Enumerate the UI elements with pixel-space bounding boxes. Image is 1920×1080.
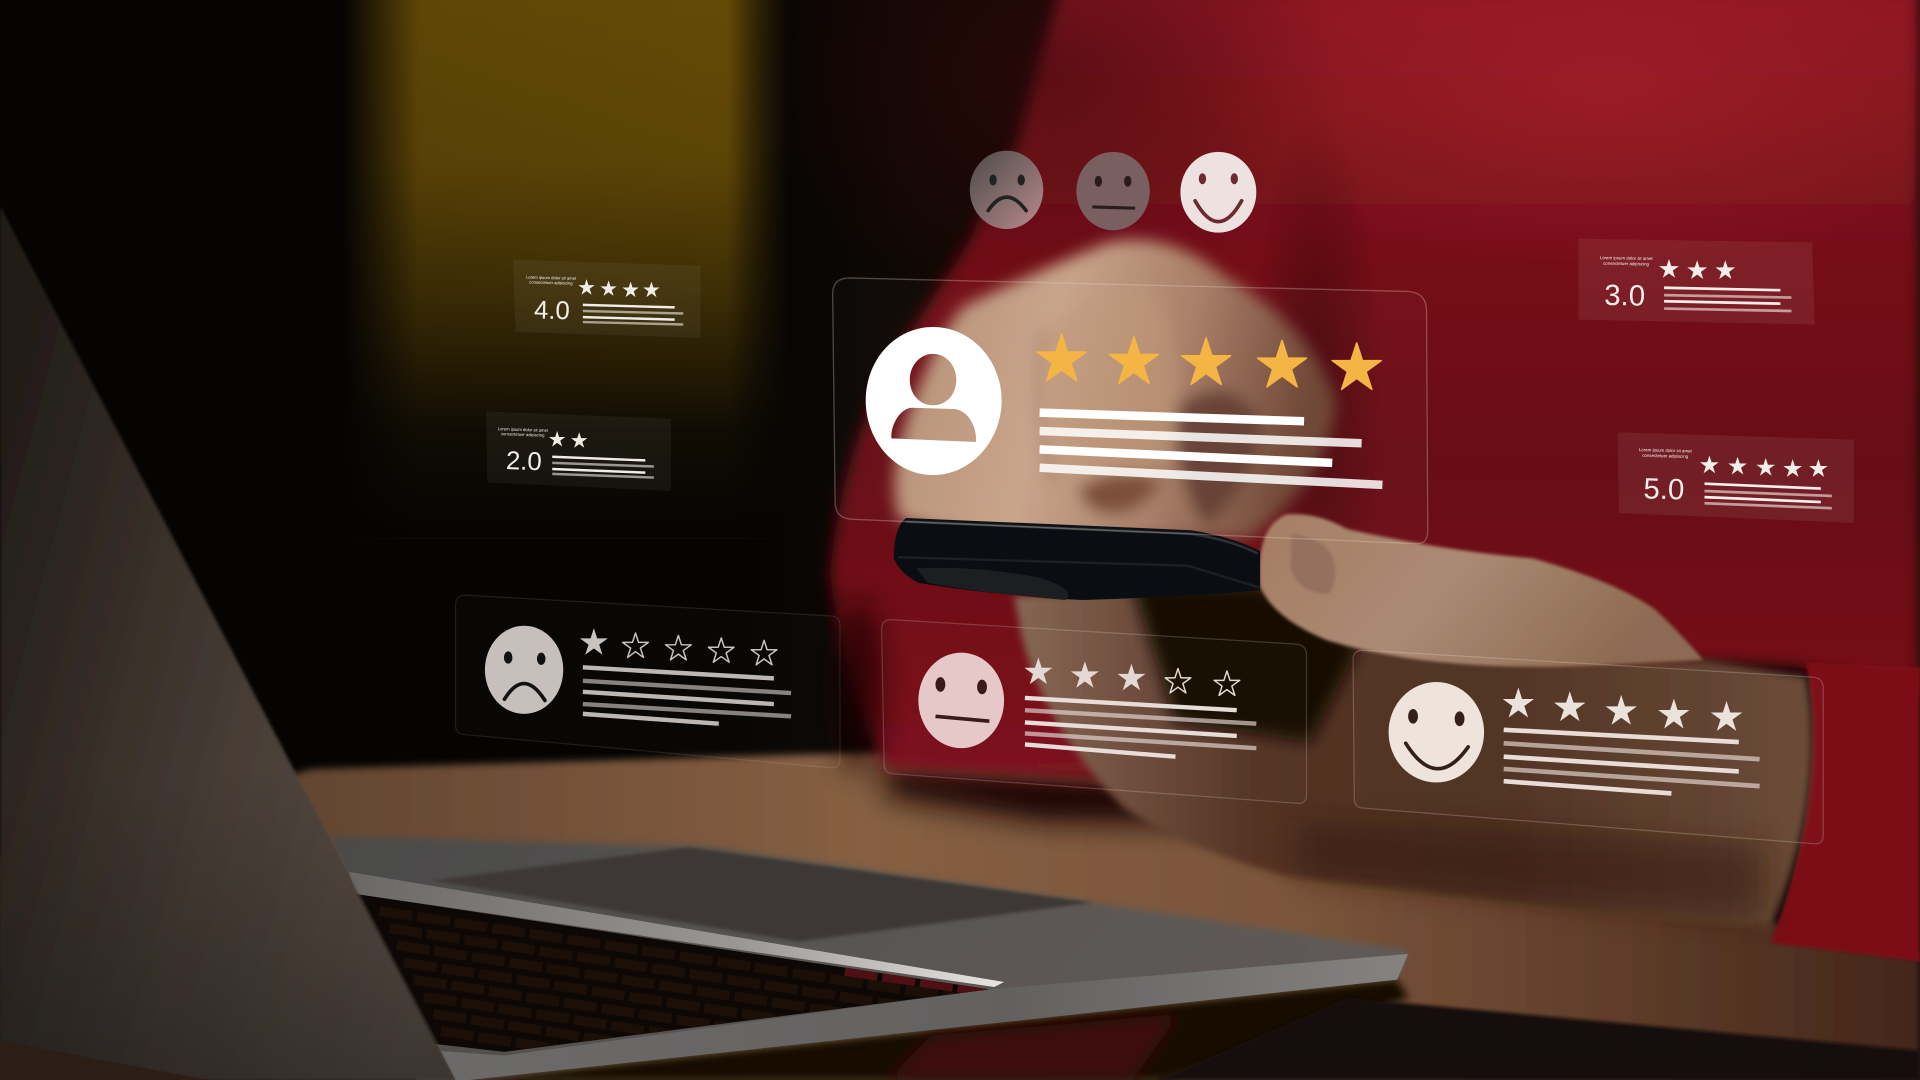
caption: Lorem ipsum dolor sit amet xyxy=(526,275,577,281)
emoji row xyxy=(970,151,1256,233)
stars xyxy=(1659,259,1735,279)
score: 4.0 xyxy=(534,296,570,325)
panel: 3.0 rating xyxy=(1578,239,1815,324)
review text lines xyxy=(1025,698,1256,757)
review text lines xyxy=(583,667,791,724)
icon: sad face xyxy=(485,626,563,714)
laptop lid xyxy=(0,206,456,1080)
icon: neutral face xyxy=(918,653,1004,748)
caption: Lorem ipsum dolor sit amet xyxy=(1639,447,1693,454)
panel: 5.0 rating xyxy=(1618,432,1854,523)
text lines xyxy=(1664,288,1791,311)
review text lines xyxy=(1040,413,1382,485)
hand: holding phone xyxy=(1014,514,1812,927)
score: 2.0 xyxy=(506,447,542,476)
laptop trackpad xyxy=(432,847,1092,942)
thumb xyxy=(1259,514,1703,667)
panel: 4.0 rating xyxy=(513,260,700,338)
thumb nail xyxy=(1291,534,1335,594)
dark surface under laptop xyxy=(469,980,1408,1080)
panel: neutral review card xyxy=(882,620,1307,803)
laptop xyxy=(0,206,1408,1080)
score: 3.0 xyxy=(1604,279,1645,313)
caption: Lorem ipsum dolor sit amet xyxy=(498,426,549,433)
five star rating xyxy=(1503,688,1742,731)
caption: consectetuer adipiscing xyxy=(501,431,545,438)
panel: 2.0 rating xyxy=(486,411,671,491)
laptop hinge strip xyxy=(349,872,1004,987)
panel: main review card xyxy=(833,278,1428,544)
caption: Lorem ipsum dolor sit amet xyxy=(1600,255,1653,261)
three star rating xyxy=(1024,658,1240,695)
bottom right dark object xyxy=(1157,998,1920,1080)
icon: happy face xyxy=(1389,682,1484,782)
panel: positive review card xyxy=(1353,650,1823,844)
caption: consectetuer adipiscing xyxy=(1642,453,1689,459)
text lines xyxy=(583,305,683,324)
icon: neutral emoji xyxy=(1076,152,1150,230)
sweater cuff xyxy=(1771,662,1920,961)
one star rating xyxy=(580,628,777,665)
lid bottom shading xyxy=(0,206,456,1080)
hand: pointing finger xyxy=(894,240,1336,539)
stars xyxy=(578,279,660,297)
icon: user avatar xyxy=(866,327,1002,475)
icon: happy emoji xyxy=(1180,152,1256,233)
review text lines xyxy=(1504,730,1760,793)
laptop keys xyxy=(379,906,988,1049)
gold five star rating xyxy=(1037,334,1381,389)
text lines xyxy=(1704,484,1832,508)
smartphone xyxy=(894,518,1260,600)
caption: consectetuer adipiscing xyxy=(1603,261,1650,267)
score: 5.0 xyxy=(1643,472,1685,506)
palm shadow xyxy=(1133,585,1359,742)
laptop base xyxy=(331,836,1408,1080)
icon: sad emoji xyxy=(970,151,1043,229)
palm xyxy=(1014,588,1812,927)
laptop front edge xyxy=(416,954,1408,1080)
caption: consectetuer adipiscing xyxy=(529,280,573,286)
panel: negative review card xyxy=(456,595,840,768)
stars xyxy=(549,431,587,448)
stars xyxy=(1700,456,1828,477)
laptop keyboard xyxy=(355,894,989,1052)
desk corner xyxy=(0,1041,208,1080)
text lines xyxy=(552,457,654,478)
